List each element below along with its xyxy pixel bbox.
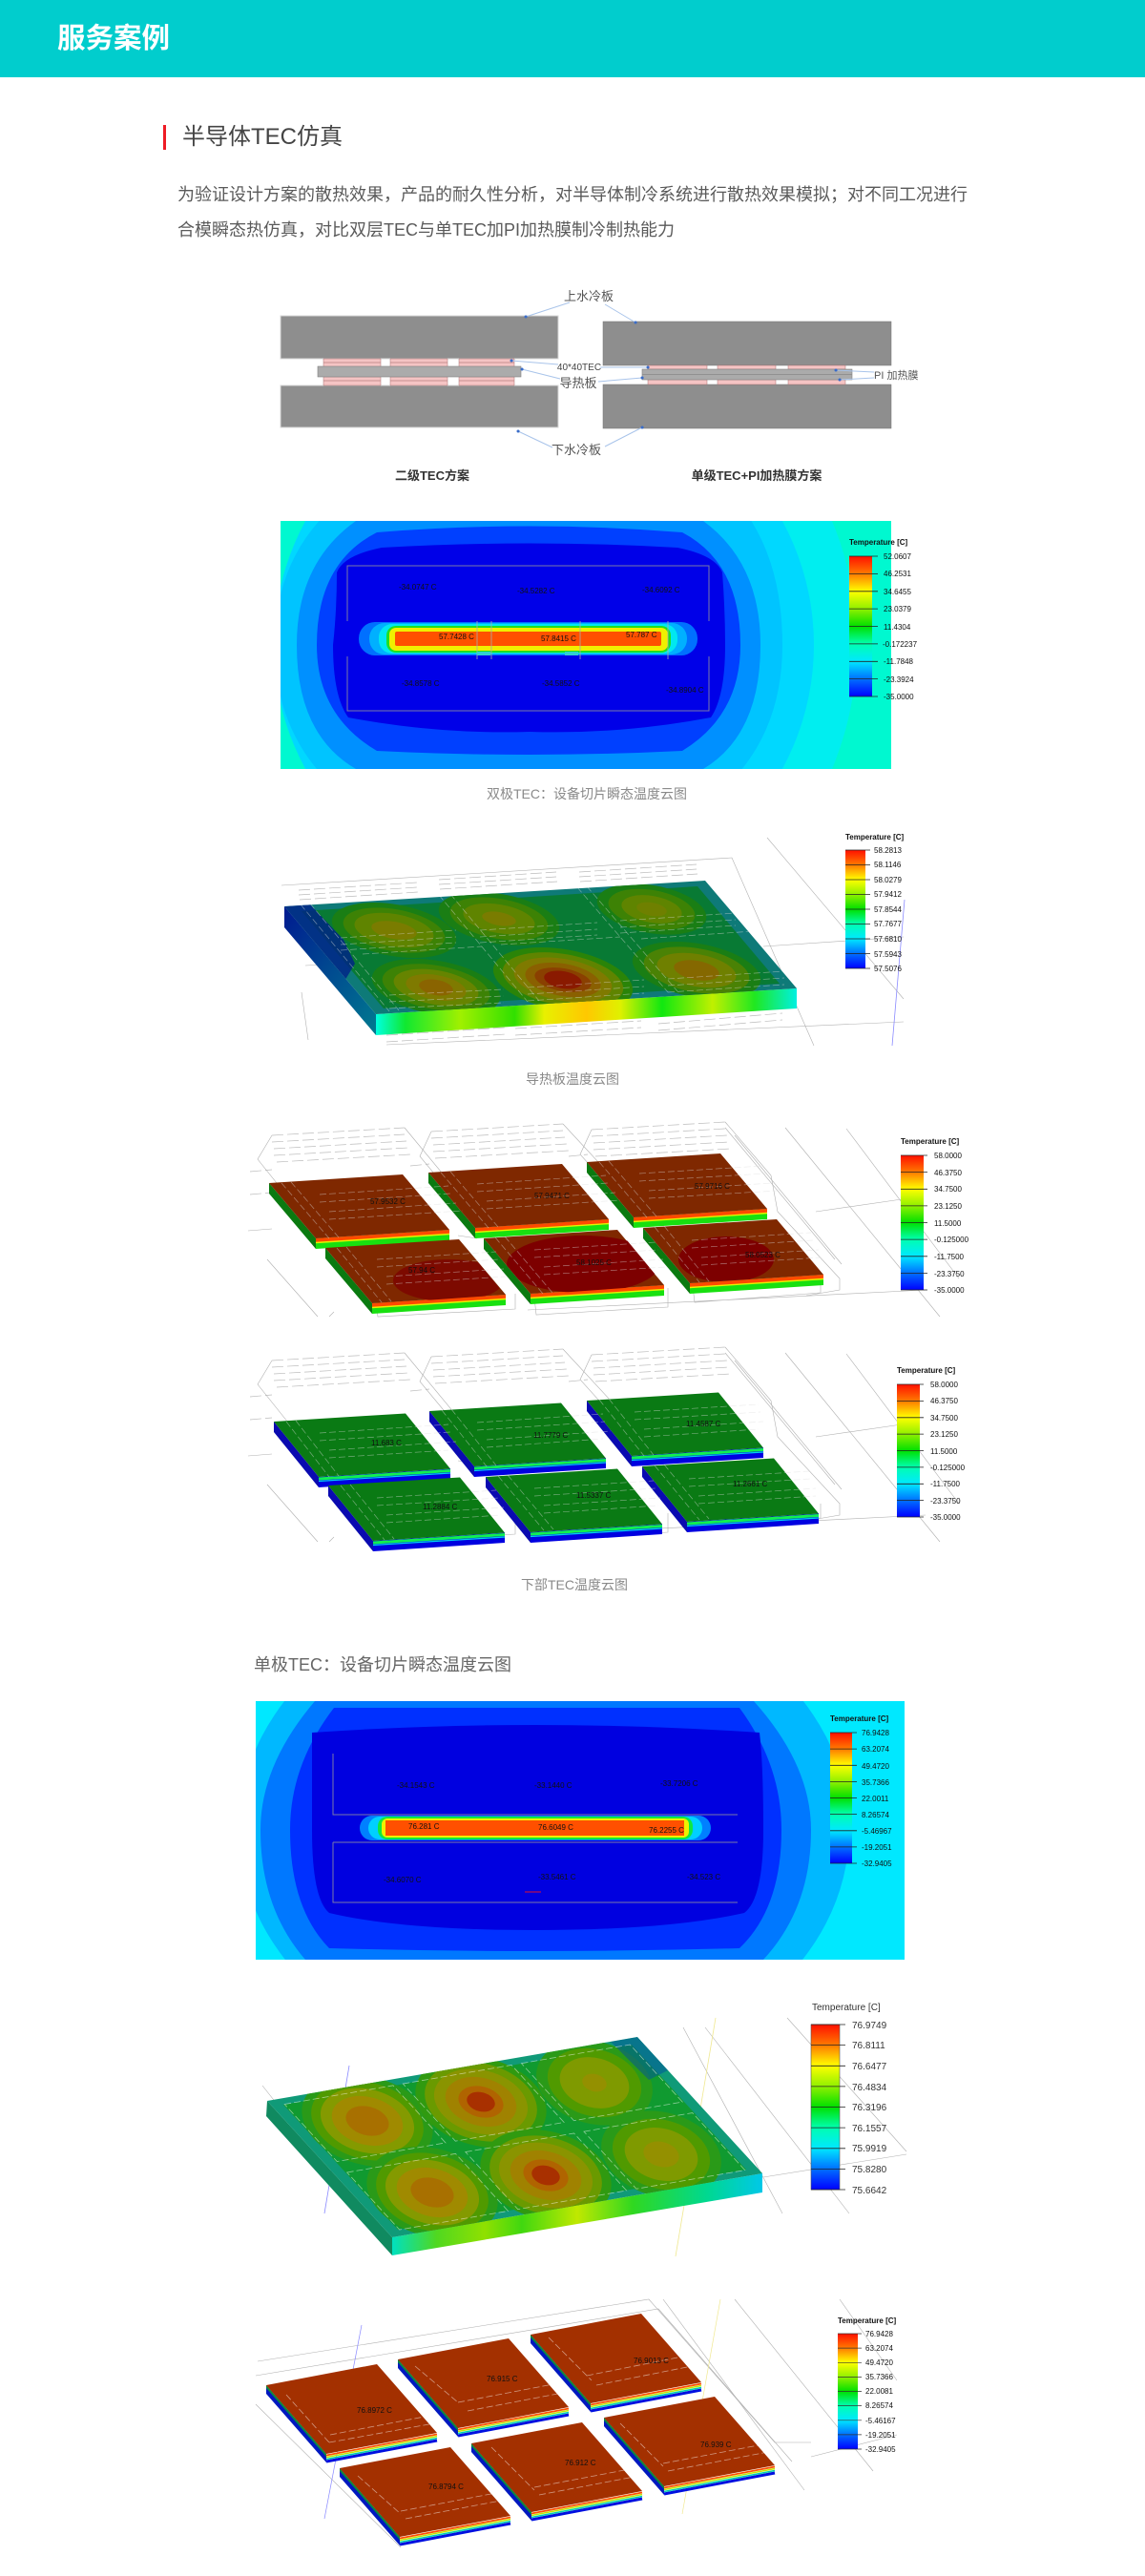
probe labels: -33.1440 C bbox=[534, 1781, 572, 1790]
probe temperature labels: -34.5282 C bbox=[517, 587, 555, 595]
diagram labels bbox=[395, 289, 918, 483]
probe labels: 11.5337 C bbox=[576, 1491, 612, 1500]
probe labels: 58.1025 C bbox=[576, 1258, 612, 1267]
intro paragraph: 合模瞬态热仿真，对比双层TEC与单TEC加PI加热膜制冷制热能力 bbox=[177, 220, 675, 239]
probe labels: 76.915 C bbox=[487, 2375, 518, 2383]
legend: lower TEC: 46.3750 bbox=[930, 1397, 958, 1405]
probe temperature labels: -34.0747 C bbox=[399, 583, 437, 592]
right scheme: single-stage TEC with PI film bbox=[603, 322, 891, 428]
legend: single-stage heat spreader: 75.8280 bbox=[852, 2165, 887, 2175]
legend: upper TEC: 23.1250 bbox=[934, 1202, 962, 1211]
background wireframe bbox=[256, 2299, 897, 2547]
probe labels: -33.7206 C bbox=[660, 1779, 698, 1788]
legend: lower TEC: 34.7500 bbox=[930, 1414, 958, 1423]
probe labels: 76.939 C bbox=[700, 2441, 732, 2449]
probe temperature labels: 57.7428 C bbox=[439, 633, 474, 641]
legend: upper TEC: Temperature [C] bbox=[901, 1137, 960, 1146]
temperature legend: 23.0379 bbox=[884, 605, 911, 613]
probe labels: 76.8972 C bbox=[357, 2406, 392, 2415]
legend: single-stage TEC: 35.7366 bbox=[865, 2373, 893, 2381]
probe temperature labels: -34.6092 C bbox=[642, 586, 680, 594]
callout arrows bbox=[511, 302, 874, 447]
temperature legend: 52.0607 bbox=[884, 552, 911, 561]
legend: upper TEC: -11.7500 bbox=[934, 1253, 965, 1261]
probe labels: 11.7779 C bbox=[533, 1431, 569, 1440]
red accent bar bbox=[163, 125, 166, 150]
legend: lower TEC: 23.1250 bbox=[930, 1430, 958, 1439]
legend: lower TEC bbox=[897, 1366, 966, 1522]
legend: upper TEC: -0.125000 bbox=[934, 1236, 969, 1244]
temperature legend: 34.6455 bbox=[884, 588, 911, 596]
probe labels bbox=[371, 1420, 768, 1511]
3D plot: heat-spreader temperature bbox=[281, 833, 905, 1046]
diagram labels: 40*40TEC bbox=[557, 363, 601, 373]
legend: single-stage section: 8.26574 bbox=[862, 1811, 889, 1819]
probe temperature labels: -34.8904 C bbox=[666, 686, 704, 695]
legend: single-stage heat spreader: 76.3196 bbox=[852, 2103, 887, 2113]
legend: heat spreader: 57.7677 bbox=[874, 920, 902, 928]
probe labels: 76.8794 C bbox=[428, 2483, 464, 2491]
temperature legend: -0.172237 bbox=[883, 640, 918, 649]
temperature legend: -35.0000 bbox=[884, 693, 914, 701]
probe temperature labels: -34.8578 C bbox=[402, 679, 440, 688]
legend: heat spreader: 57.8544 bbox=[874, 905, 902, 914]
legend: single-stage TEC: -32.9405 bbox=[865, 2445, 896, 2454]
probe labels: 76.6049 C bbox=[538, 1823, 573, 1832]
3D plot: single-stage TEC temperature bbox=[256, 2299, 897, 2547]
legend: heat spreader: 58.2813 bbox=[874, 846, 902, 855]
probe labels: 76.2255 C bbox=[649, 1826, 684, 1835]
legend: single-stage heat spreader: 75.9919 bbox=[852, 2144, 887, 2154]
header title: 服务案例 bbox=[57, 23, 170, 54]
diagram labels: 单级TEC+PI加热膜方案 bbox=[692, 468, 822, 483]
legend: upper TEC: 34.7500 bbox=[934, 1185, 962, 1194]
probe labels: 11.2661 C bbox=[733, 1480, 768, 1488]
probe labels bbox=[384, 1779, 720, 1884]
diagram labels: 二级TEC方案 bbox=[395, 468, 469, 483]
3D plot: upper TEC temperature bbox=[248, 1122, 969, 1317]
contour plot: single-stage TEC section bbox=[256, 1701, 905, 1960]
probe labels: -33.5461 C bbox=[538, 1873, 576, 1881]
diagram labels: 导热板 bbox=[559, 376, 597, 390]
legend: single-stage section bbox=[830, 1714, 892, 1868]
probe labels: 57.9716 C bbox=[695, 1182, 730, 1191]
probe labels: -34.6070 C bbox=[384, 1876, 422, 1884]
sub-heading: single-stage TEC: 单极TEC：设备切片瞬态温度云图 bbox=[254, 1655, 511, 1674]
legend: lower TEC: 58.0000 bbox=[930, 1381, 958, 1389]
caption: heat spreader: 导热板温度云图 bbox=[526, 1071, 619, 1087]
legend: single-stage TEC: -5.46167 bbox=[865, 2417, 896, 2425]
caption: lower TEC: 下部TEC温度云图 bbox=[521, 1577, 628, 1592]
legend: single-stage section: -19.2051 bbox=[862, 1843, 892, 1852]
contour plot: dual-stage TEC section bbox=[281, 521, 917, 769]
legend: lower TEC: -11.7500 bbox=[930, 1480, 961, 1488]
legend: heat spreader: 57.9412 bbox=[874, 890, 902, 899]
legend: upper TEC: 11.5000 bbox=[934, 1219, 962, 1228]
diagram labels: 上水冷板 bbox=[564, 289, 614, 303]
legend: lower TEC: Temperature [C] bbox=[897, 1366, 956, 1375]
temperature legend: -23.3924 bbox=[884, 675, 914, 684]
probe labels: 76.9013 C bbox=[634, 2357, 669, 2365]
TEC modules, cold side bbox=[274, 1393, 819, 1551]
legend: upper TEC: 46.3750 bbox=[934, 1169, 962, 1177]
legend: single-stage section: 49.4720 bbox=[862, 1762, 889, 1771]
temperature legend: Temperature [C] bbox=[849, 538, 908, 547]
background wireframe bbox=[262, 2018, 906, 2256]
probe temperature labels: 57.8415 C bbox=[541, 634, 576, 643]
probe temperature labels: -34.5852 C bbox=[542, 679, 580, 688]
probe labels: 58.0523 C bbox=[745, 1251, 781, 1259]
temperature legend: 46.2531 bbox=[884, 570, 911, 578]
legend: single-stage section: 76.9428 bbox=[862, 1729, 889, 1737]
legend: heat spreader: 57.5943 bbox=[874, 950, 902, 959]
legend: single-stage TEC: Temperature [C] bbox=[838, 2316, 897, 2325]
section heading bbox=[163, 124, 343, 150]
probe labels: 11.4587 C bbox=[686, 1420, 721, 1428]
legend: heat spreader: 57.5076 bbox=[874, 965, 902, 973]
probe temperature labels bbox=[399, 583, 704, 695]
intro paragraph: 为验证设计方案的散热效果，产品的耐久性分析，对半导体制冷系统进行散热效果模拟；对不同工况进行 bbox=[177, 185, 968, 204]
legend: single-stage section: Temperature [C] bbox=[830, 1714, 889, 1723]
temperature legend bbox=[849, 538, 918, 701]
left scheme: two-stage TEC bbox=[281, 316, 558, 427]
temperature legend: 11.4304 bbox=[884, 623, 911, 632]
probe labels: -34.523 C bbox=[687, 1873, 720, 1881]
legend: lower TEC: -35.0000 bbox=[930, 1513, 961, 1522]
probe labels: 57.9532 C bbox=[370, 1197, 406, 1206]
legend: single-stage TEC: -19.2051 bbox=[865, 2431, 896, 2440]
legend: single-stage heat spreader: 76.4834 bbox=[852, 2083, 887, 2093]
legend: single-stage heat spreader: 76.1557 bbox=[852, 2124, 887, 2134]
TEC modules bbox=[266, 2314, 775, 2545]
legend: single-stage heat spreader: 76.6477 bbox=[852, 2062, 887, 2072]
probe labels: 11.683 C bbox=[371, 1439, 402, 1447]
legend: upper TEC bbox=[901, 1137, 969, 1295]
legend: heat spreader: Temperature [C] bbox=[845, 833, 905, 841]
3D plot: lower TEC temperature bbox=[248, 1347, 966, 1551]
intro paragraph bbox=[177, 185, 968, 239]
probe labels: 57.9471 C bbox=[534, 1192, 570, 1200]
legend: single-stage TEC: 49.4720 bbox=[865, 2358, 893, 2367]
header banner bbox=[0, 0, 1145, 77]
legend: lower TEC: 11.5000 bbox=[930, 1447, 958, 1456]
legend: single-stage section: 63.2074 bbox=[862, 1745, 889, 1754]
legend: heat spreader: 58.1146 bbox=[874, 861, 902, 869]
legend: single-stage TEC bbox=[838, 2316, 897, 2454]
legend: single-stage section: 35.7366 bbox=[862, 1778, 889, 1787]
caption: dual-stage section: 双极TEC：设备切片瞬态温度云图 bbox=[487, 786, 687, 801]
legend: heat spreader bbox=[845, 833, 905, 973]
probe labels: 11.2884 C bbox=[423, 1503, 458, 1511]
legend: lower TEC: -23.3750 bbox=[930, 1497, 961, 1506]
legend: heat spreader: 57.6810 bbox=[874, 935, 902, 944]
legend: single-stage heat spreader: 76.9749 bbox=[852, 2021, 887, 2031]
probe temperature labels: 57.787 C bbox=[626, 631, 657, 639]
probe labels bbox=[370, 1182, 781, 1275]
legend: single-stage TEC: 63.2074 bbox=[865, 2344, 893, 2353]
legend: single-stage heat spreader bbox=[811, 2003, 887, 2196]
legend: single-stage heat spreader: 75.6642 bbox=[852, 2186, 887, 2196]
legend: single-stage TEC: 8.26574 bbox=[865, 2401, 893, 2410]
legend: single-stage heat spreader: 76.8111 bbox=[852, 2041, 885, 2051]
legend: upper TEC: 58.0000 bbox=[934, 1152, 962, 1160]
TEC modules, hot side bbox=[269, 1153, 823, 1314]
probe labels: 76.281 C bbox=[408, 1822, 440, 1831]
probe labels: 76.912 C bbox=[565, 2459, 596, 2467]
probe labels bbox=[357, 2357, 732, 2491]
legend: single-stage section: -32.9405 bbox=[862, 1859, 892, 1868]
legend: single-stage TEC: 76.9428 bbox=[865, 2330, 893, 2338]
heading text: 半导体TEC仿真 bbox=[182, 124, 343, 150]
legend: lower TEC: -0.125000 bbox=[930, 1464, 966, 1472]
legend: single-stage section: -5.46967 bbox=[862, 1827, 892, 1836]
legend: single-stage section: 22.0011 bbox=[862, 1795, 889, 1803]
legend: single-stage heat spreader: Temperature [C] bbox=[812, 2003, 881, 2013]
legend: single-stage TEC: 22.0081 bbox=[865, 2387, 893, 2396]
3D plot: single-stage heat spreader bbox=[262, 2003, 906, 2256]
diagram labels: PI 加热膜 bbox=[874, 369, 918, 382]
temperature legend: -11.7848 bbox=[884, 657, 914, 666]
legend: heat spreader: 58.0279 bbox=[874, 876, 902, 884]
probe labels: -34.1543 C bbox=[397, 1781, 435, 1790]
comparison diagram: cold plates and TEC bbox=[281, 289, 918, 483]
probe labels: 57.94 C bbox=[408, 1266, 435, 1275]
background wireframe bbox=[281, 838, 905, 1046]
diagram labels: 下水冷板 bbox=[552, 443, 601, 457]
legend: upper TEC: -35.0000 bbox=[934, 1286, 965, 1295]
legend: upper TEC: -23.3750 bbox=[934, 1270, 965, 1278]
